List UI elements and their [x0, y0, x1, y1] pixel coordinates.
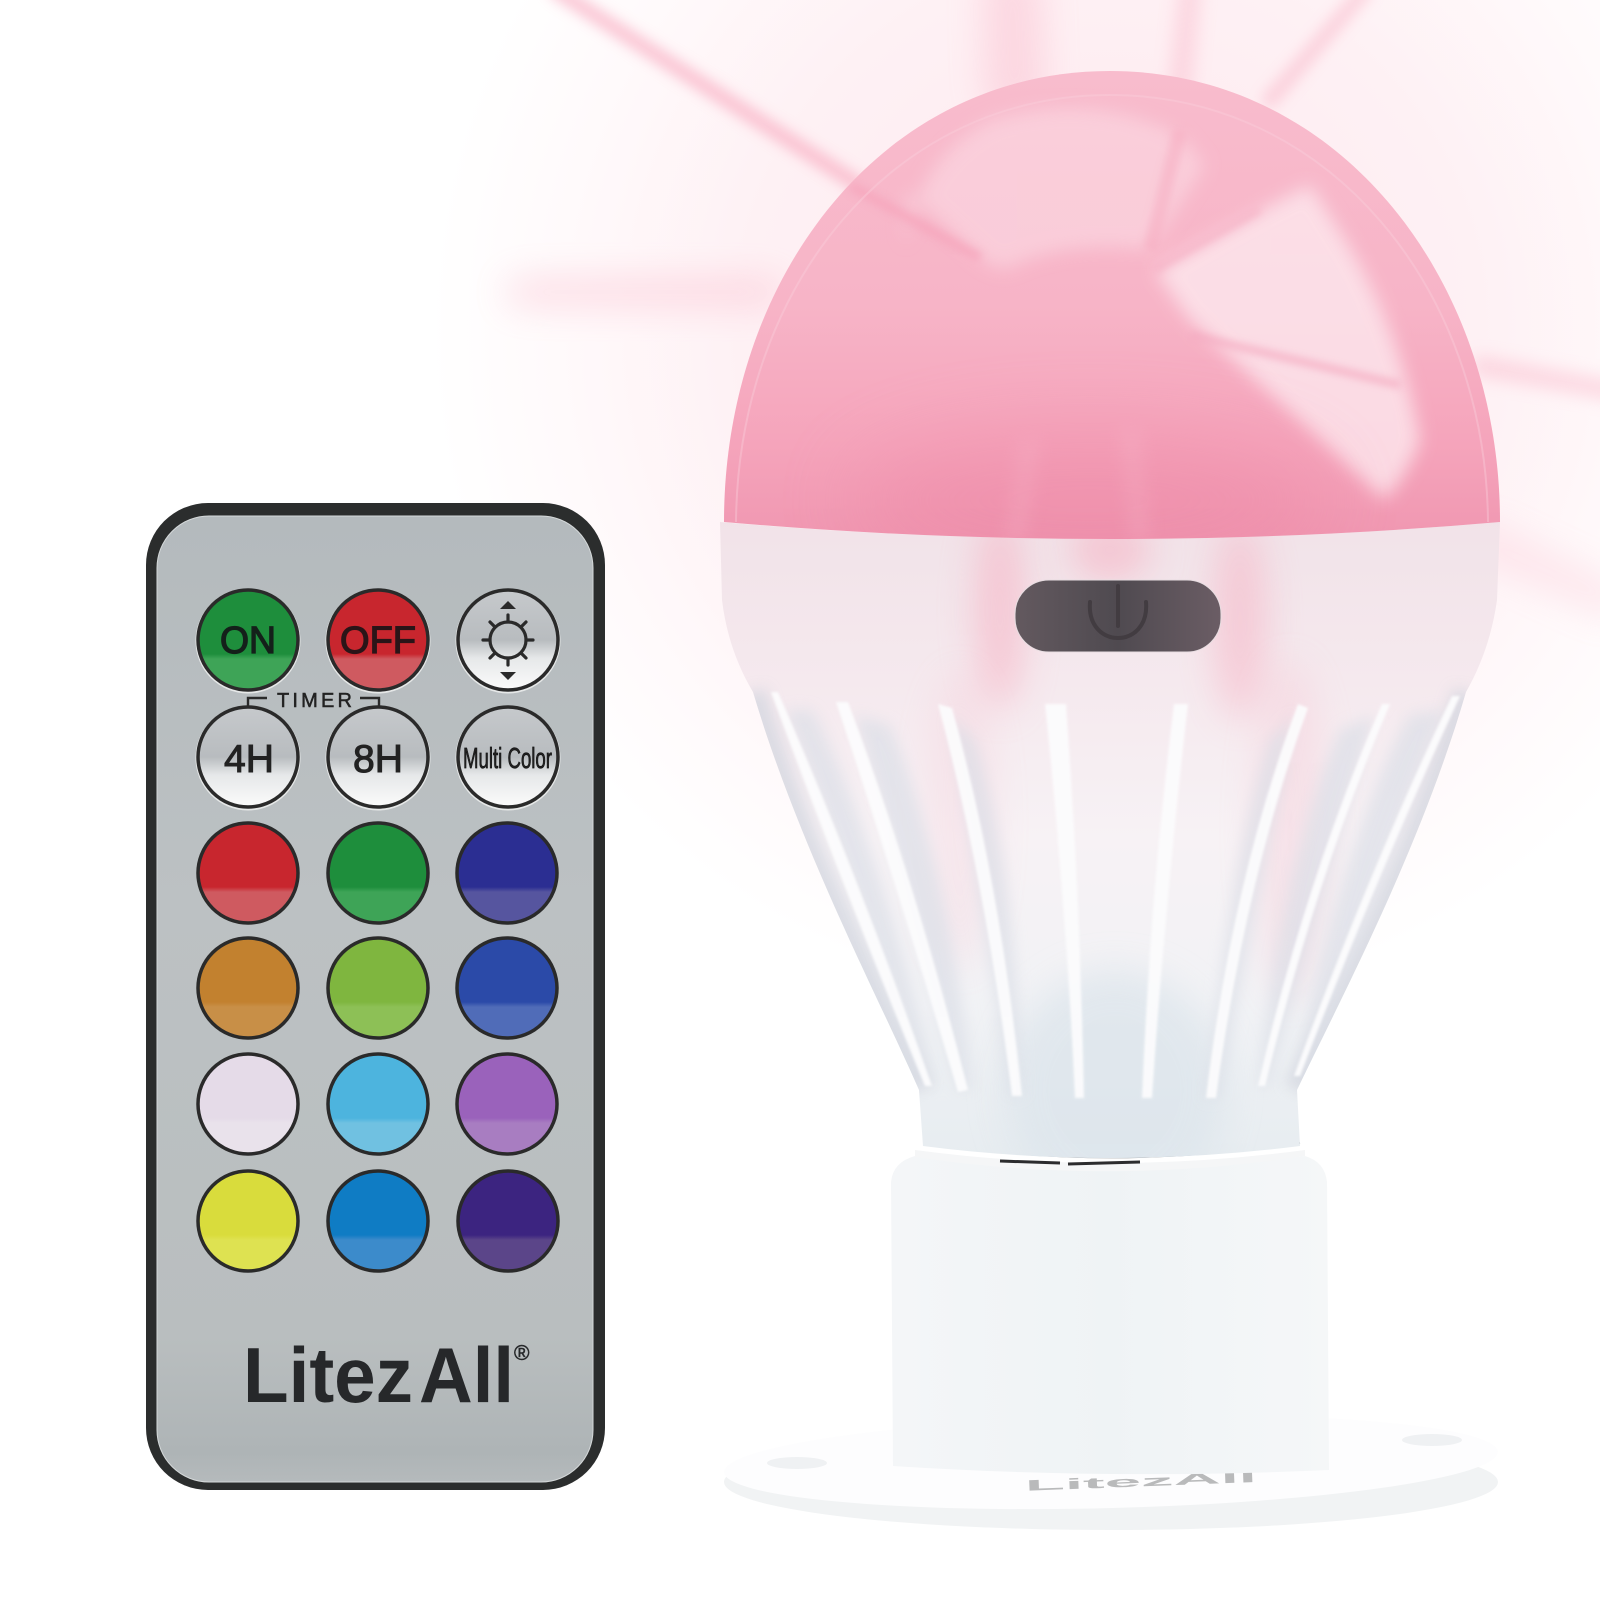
colour buttons grid: [198, 823, 558, 1271]
dome interior highlights: [850, 108, 1420, 570]
base logo text: LitezAll: [1025, 1469, 1257, 1495]
colour: yellow: [198, 1171, 298, 1271]
colour: green: [328, 823, 428, 923]
colour: dark blue: [457, 823, 557, 923]
timer label: TIMER: [277, 690, 352, 712]
icon: up and down arrows: [500, 601, 516, 680]
button: Multi Color: [456, 706, 560, 810]
base plate: [723, 1406, 1499, 1530]
button: OFF: [326, 588, 430, 694]
dome: [724, 71, 1500, 570]
timer label: [248, 690, 379, 712]
button: Multi Color: Multi Color: [463, 743, 552, 775]
button: 4H: 4H: [224, 738, 274, 781]
icon: power symbol: [1090, 586, 1146, 638]
socket: [891, 1156, 1329, 1474]
colour: sky blue: [328, 1054, 428, 1154]
button: OFF: OFF: [340, 620, 416, 662]
brand logo: ®: [514, 1342, 530, 1365]
ribs: [771, 692, 1460, 1098]
remote casing: [146, 503, 605, 1490]
mounting hole left: [767, 1457, 827, 1469]
button: 4H: [196, 706, 300, 810]
brand logo: [243, 1331, 530, 1419]
colour: pale lilac: [198, 1054, 298, 1154]
colour: lime: [328, 938, 428, 1038]
colour: royal blue: [457, 938, 557, 1038]
colour: violet: [458, 1171, 558, 1271]
brand logo: Litez: [243, 1331, 413, 1419]
chrome ring: [915, 1143, 1305, 1171]
button: ON: [196, 588, 300, 694]
bulb lamp: [700, 71, 1520, 1530]
edge shading: [753, 692, 1466, 1090]
bulb body: [720, 522, 1500, 1158]
button: 8H: [326, 706, 430, 810]
colour: amber: [198, 938, 298, 1038]
colour: red: [198, 823, 298, 923]
dome rim: [736, 95, 1488, 522]
button: ON: ON: [220, 620, 276, 662]
remote face: [157, 516, 593, 1482]
pink glow on collar: [924, 510, 1326, 1000]
remote control: [146, 503, 605, 1490]
grooves: [785, 710, 1445, 1098]
mounting hole right: [1402, 1434, 1462, 1446]
grey shade lower centre: [1017, 970, 1212, 1158]
power button: [1015, 580, 1221, 652]
button: brightness: [456, 588, 560, 694]
light rays: [520, 0, 1600, 600]
icon: sun: [483, 615, 533, 665]
colour: azure: [328, 1171, 428, 1271]
button: 8H: 8H: [353, 738, 403, 781]
brand logo: All: [419, 1331, 514, 1419]
colour: purple: [457, 1054, 557, 1154]
